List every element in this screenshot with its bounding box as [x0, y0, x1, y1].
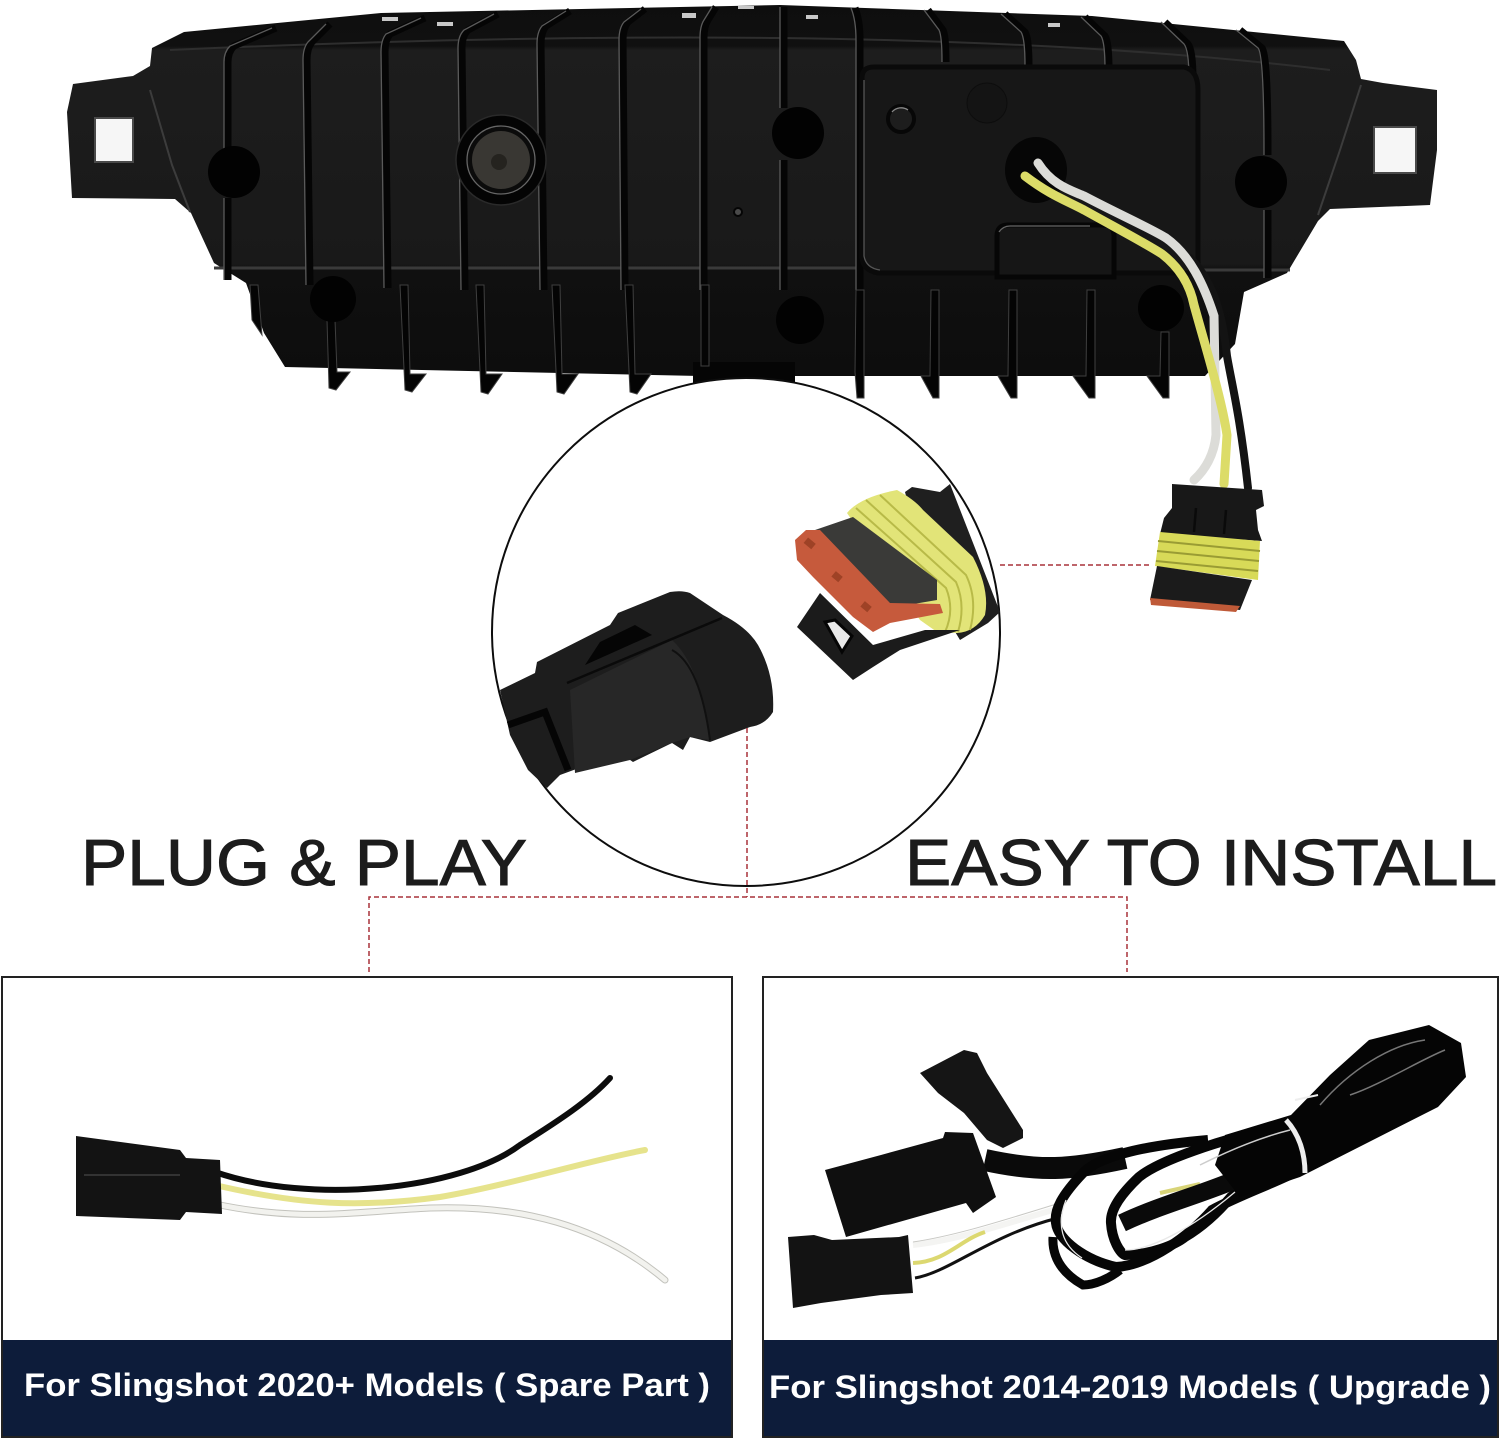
- round sensor: [456, 115, 546, 205]
- housing ribs: [224, 7, 1268, 290]
- male connector: [500, 591, 773, 788]
- three-wire harness: [76, 1078, 665, 1280]
- caption bar: [764, 1340, 1497, 1436]
- mounting holes: [208, 107, 1287, 344]
- heading: plug and play: PLUG & PLAY: [81, 826, 527, 899]
- inset circle: connector pair: [492, 378, 1000, 886]
- connector top: [920, 1050, 1023, 1148]
- raised connector plate: [862, 67, 1198, 273]
- wire harness from lamp: [1025, 163, 1248, 488]
- tab holes: [95, 118, 1416, 173]
- wire grommet: [1005, 137, 1067, 203]
- dashed leader: inset to harness boxes: [369, 728, 1127, 972]
- heading: easy to install: EASY TO INSTALL: [905, 826, 1497, 899]
- female connector: [795, 484, 1000, 680]
- caption: For Slingshot 2014-2019 Models ( Upgrade ): [769, 1369, 1491, 1405]
- caption: For Slingshot 2020+ Models ( Spare Part ): [24, 1367, 710, 1403]
- lower band line: [214, 268, 1290, 270]
- connector on lamp pigtail: [1150, 484, 1264, 612]
- panel: 2020+ spare part: [2, 977, 732, 1437]
- panel: 2014-2019 upgrade: [763, 977, 1498, 1437]
- caption bar: [3, 1340, 731, 1436]
- top clips: [382, 6, 1060, 27]
- connector lower: [788, 1235, 913, 1308]
- dashed leader: pigtail to inset: [1000, 564, 1152, 566]
- coiled adapter harness: [788, 1025, 1466, 1308]
- connector middle: [825, 1132, 996, 1237]
- lower fins: [250, 285, 1169, 398]
- lamp housing rear view: [67, 5, 1437, 398]
